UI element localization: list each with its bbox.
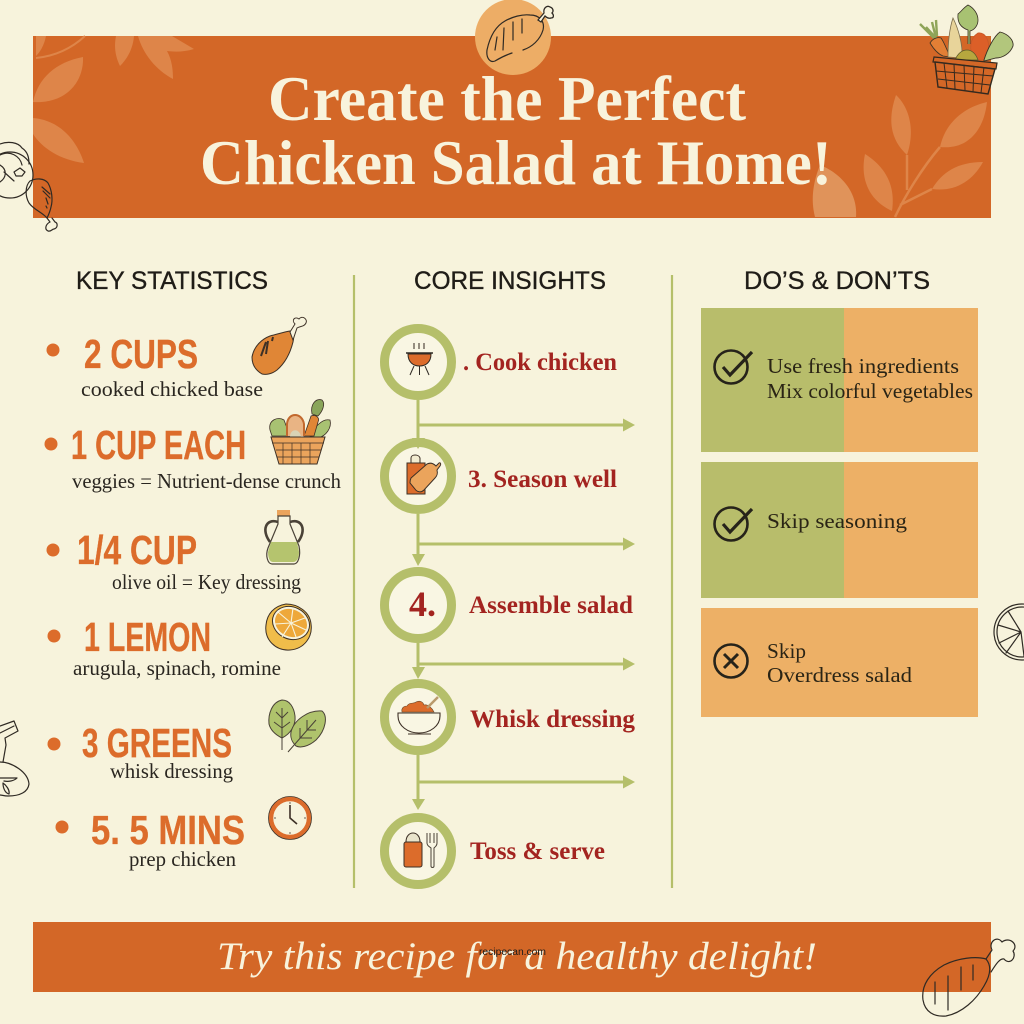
- stat: 1 lemon: 1 LEMON: [84, 614, 211, 660]
- decorative leaves: bottom right: [813, 95, 987, 217]
- icon: green leaves: [269, 700, 325, 752]
- doodle: drumstick left: [26, 179, 57, 231]
- icon: roast drumstick: [252, 317, 306, 374]
- decorative leaves: top left: [33, 36, 194, 163]
- icon: shaker and cutting board: [407, 455, 441, 494]
- icon: chicken breast badge: [475, 0, 553, 75]
- doodle: drumstick footer: [923, 939, 1015, 1016]
- panel: key statistics: [44, 267, 341, 871]
- icon: lemon half: [266, 600, 315, 650]
- doodle: oil bottle and bowl left: [0, 721, 29, 796]
- card: don't overdress: Skip: [767, 639, 806, 663]
- stat: 3 greens: 3 GREENS: [82, 720, 232, 766]
- step: assemble salad: Assemble salad: [469, 592, 633, 619]
- card: skip seasoning: [701, 462, 978, 598]
- stat: 2 cups: cooked chicked base: [81, 377, 263, 401]
- card: don't overdress: Overdress salad: [767, 663, 912, 687]
- step: season well: 3. Season well: [468, 466, 617, 493]
- panel: do's and don'ts: [701, 267, 978, 717]
- stat: 5 mins: prep chicken: [129, 847, 236, 871]
- doodle: lemon slice right: [994, 604, 1024, 660]
- column dividers: [354, 275, 672, 888]
- icon: salad bowl: [398, 697, 440, 734]
- stat: 3 greens: whisk dressing: [110, 759, 233, 783]
- title: Chicken Salad at Home!: [200, 127, 832, 198]
- card: don't overdress: [701, 608, 978, 717]
- icon: oil bottle: [265, 510, 303, 564]
- step: toss and serve: Toss & serve: [470, 838, 605, 865]
- card: skip seasoning: Skip seasoning: [767, 509, 907, 533]
- stat: 5 mins: 5. 5 MINS: [91, 807, 245, 853]
- step: whisk dressing: [384, 684, 635, 750]
- icon: vegetable basket top right: [920, 5, 1013, 94]
- stat: 2 cups: [46, 331, 263, 401]
- doodle: salad bowl left: [0, 142, 33, 198]
- step: season well: [384, 442, 617, 510]
- stat: 3 greens: [48, 720, 233, 783]
- card: do fresh ingredients: [701, 308, 978, 452]
- heading: do's and don'ts: DO’S & DON’TS: [744, 267, 930, 295]
- icon: grill: [406, 343, 433, 375]
- stat: 1/4 cup: [46, 527, 301, 594]
- heading: key statistics: KEY STATISTICS: [76, 267, 268, 295]
- icon: clock: [268, 796, 312, 840]
- step: cook chicken: [384, 328, 617, 396]
- step: assemble salad: 4.: [409, 584, 436, 624]
- icon: veggie basket: [270, 400, 330, 464]
- stat: 1/4 cup: olive oil = Key dressing: [112, 570, 301, 594]
- stat: 2 cups: 2 CUPS: [84, 331, 198, 377]
- stat: 1 cup each: [44, 422, 341, 493]
- flow connectors and arrows: [412, 400, 635, 810]
- stat: 5 mins: [56, 807, 245, 871]
- step: cook chicken: . Cook chicken: [463, 349, 617, 376]
- title: [200, 63, 832, 198]
- card: do fresh ingredients: Use fresh ingredients: [767, 354, 959, 378]
- watermark: recipecan.com: [479, 947, 546, 958]
- step: toss and serve: [384, 818, 605, 884]
- footer banner: Try this recipe for a healthy delight!: [217, 935, 817, 978]
- stat: 1 cup each: 1 CUP EACH: [71, 422, 246, 468]
- stat: 1/4 cup: 1/4 CUP: [77, 527, 197, 573]
- footer banner: [33, 922, 991, 992]
- title: Create the Perfect: [268, 63, 747, 134]
- panel: core insights: [384, 267, 635, 884]
- card: do fresh ingredients: Mix colorful vegetables: [767, 379, 973, 403]
- stat: 1 lemon: [48, 614, 281, 680]
- heading: core insights: CORE INSIGHTS: [414, 267, 606, 295]
- stat: 1 lemon: arugula, spinach, romine: [73, 656, 281, 680]
- step: whisk dressing: Whisk dressing: [470, 706, 635, 733]
- step: assemble salad: [384, 572, 633, 638]
- stat: 1 cup each: veggies = Nutrient-dense crunch: [72, 469, 341, 493]
- header banner: [33, 36, 991, 218]
- icon: shaker and fork: [404, 833, 437, 868]
